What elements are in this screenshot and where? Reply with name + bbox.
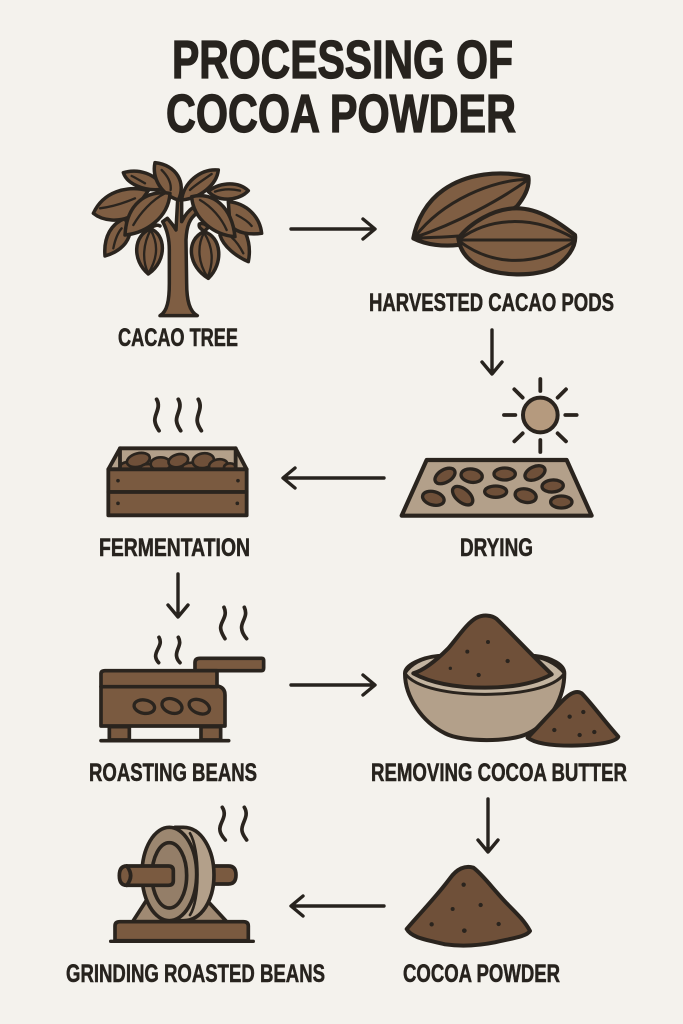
icon: bean roaster: [101, 607, 264, 741]
title: PROCESSING OF: [172, 30, 513, 90]
icon: fermentation crate: [108, 399, 247, 515]
bowl: [405, 656, 564, 740]
icon: grinding mill: [111, 807, 253, 941]
icon: cacao tree: [93, 163, 262, 316]
arrow: fermentation to roasting: [168, 574, 188, 617]
support stand: [133, 900, 227, 922]
label: cacao tree: CACAO TREE: [118, 324, 238, 352]
label: grinding roasted beans: GRINDING ROASTED BEANS: [66, 960, 325, 988]
sun: [504, 379, 577, 452]
label: roasting beans: ROASTING BEANS: [89, 759, 257, 787]
axle front: [119, 866, 173, 885]
roaster legs: [109, 727, 221, 740]
arrow: tree to pods: [291, 219, 375, 239]
steam: [220, 807, 247, 840]
icon: bowl of cocoa: [405, 616, 618, 746]
title: [166, 30, 516, 144]
mill wheel rim: [172, 827, 214, 921]
title: COCOA POWDER: [166, 84, 516, 144]
arrow: powder to grinding: [291, 896, 384, 916]
roaster body: [101, 671, 225, 726]
label: cocoa powder: COCOA POWDER: [403, 960, 560, 988]
arrow: drying to fermentation: [283, 468, 384, 488]
axle back: [210, 866, 236, 884]
arrow: butter to powder: [478, 799, 498, 852]
steam: [155, 399, 201, 431]
fermenting beans: [120, 451, 236, 473]
icon: harvested cacao pods: [413, 173, 575, 274]
small side heap: [528, 692, 618, 746]
steam: [156, 607, 247, 663]
icon: drying beans under sun: [402, 379, 592, 516]
base: [115, 922, 248, 941]
roaster handle: [195, 658, 264, 671]
label: fermentation: FERMENTATION: [99, 534, 250, 562]
beans: [421, 463, 572, 508]
crate planks: [108, 469, 247, 492]
arrow: pods to drying: [482, 330, 502, 374]
icon: cocoa powder pile: [407, 867, 530, 946]
cocoa heap in bowl: [413, 616, 552, 688]
label: drying: DRYING: [460, 534, 533, 562]
drying tray: [402, 460, 592, 516]
arrow: roasting to removing butter: [291, 675, 375, 695]
